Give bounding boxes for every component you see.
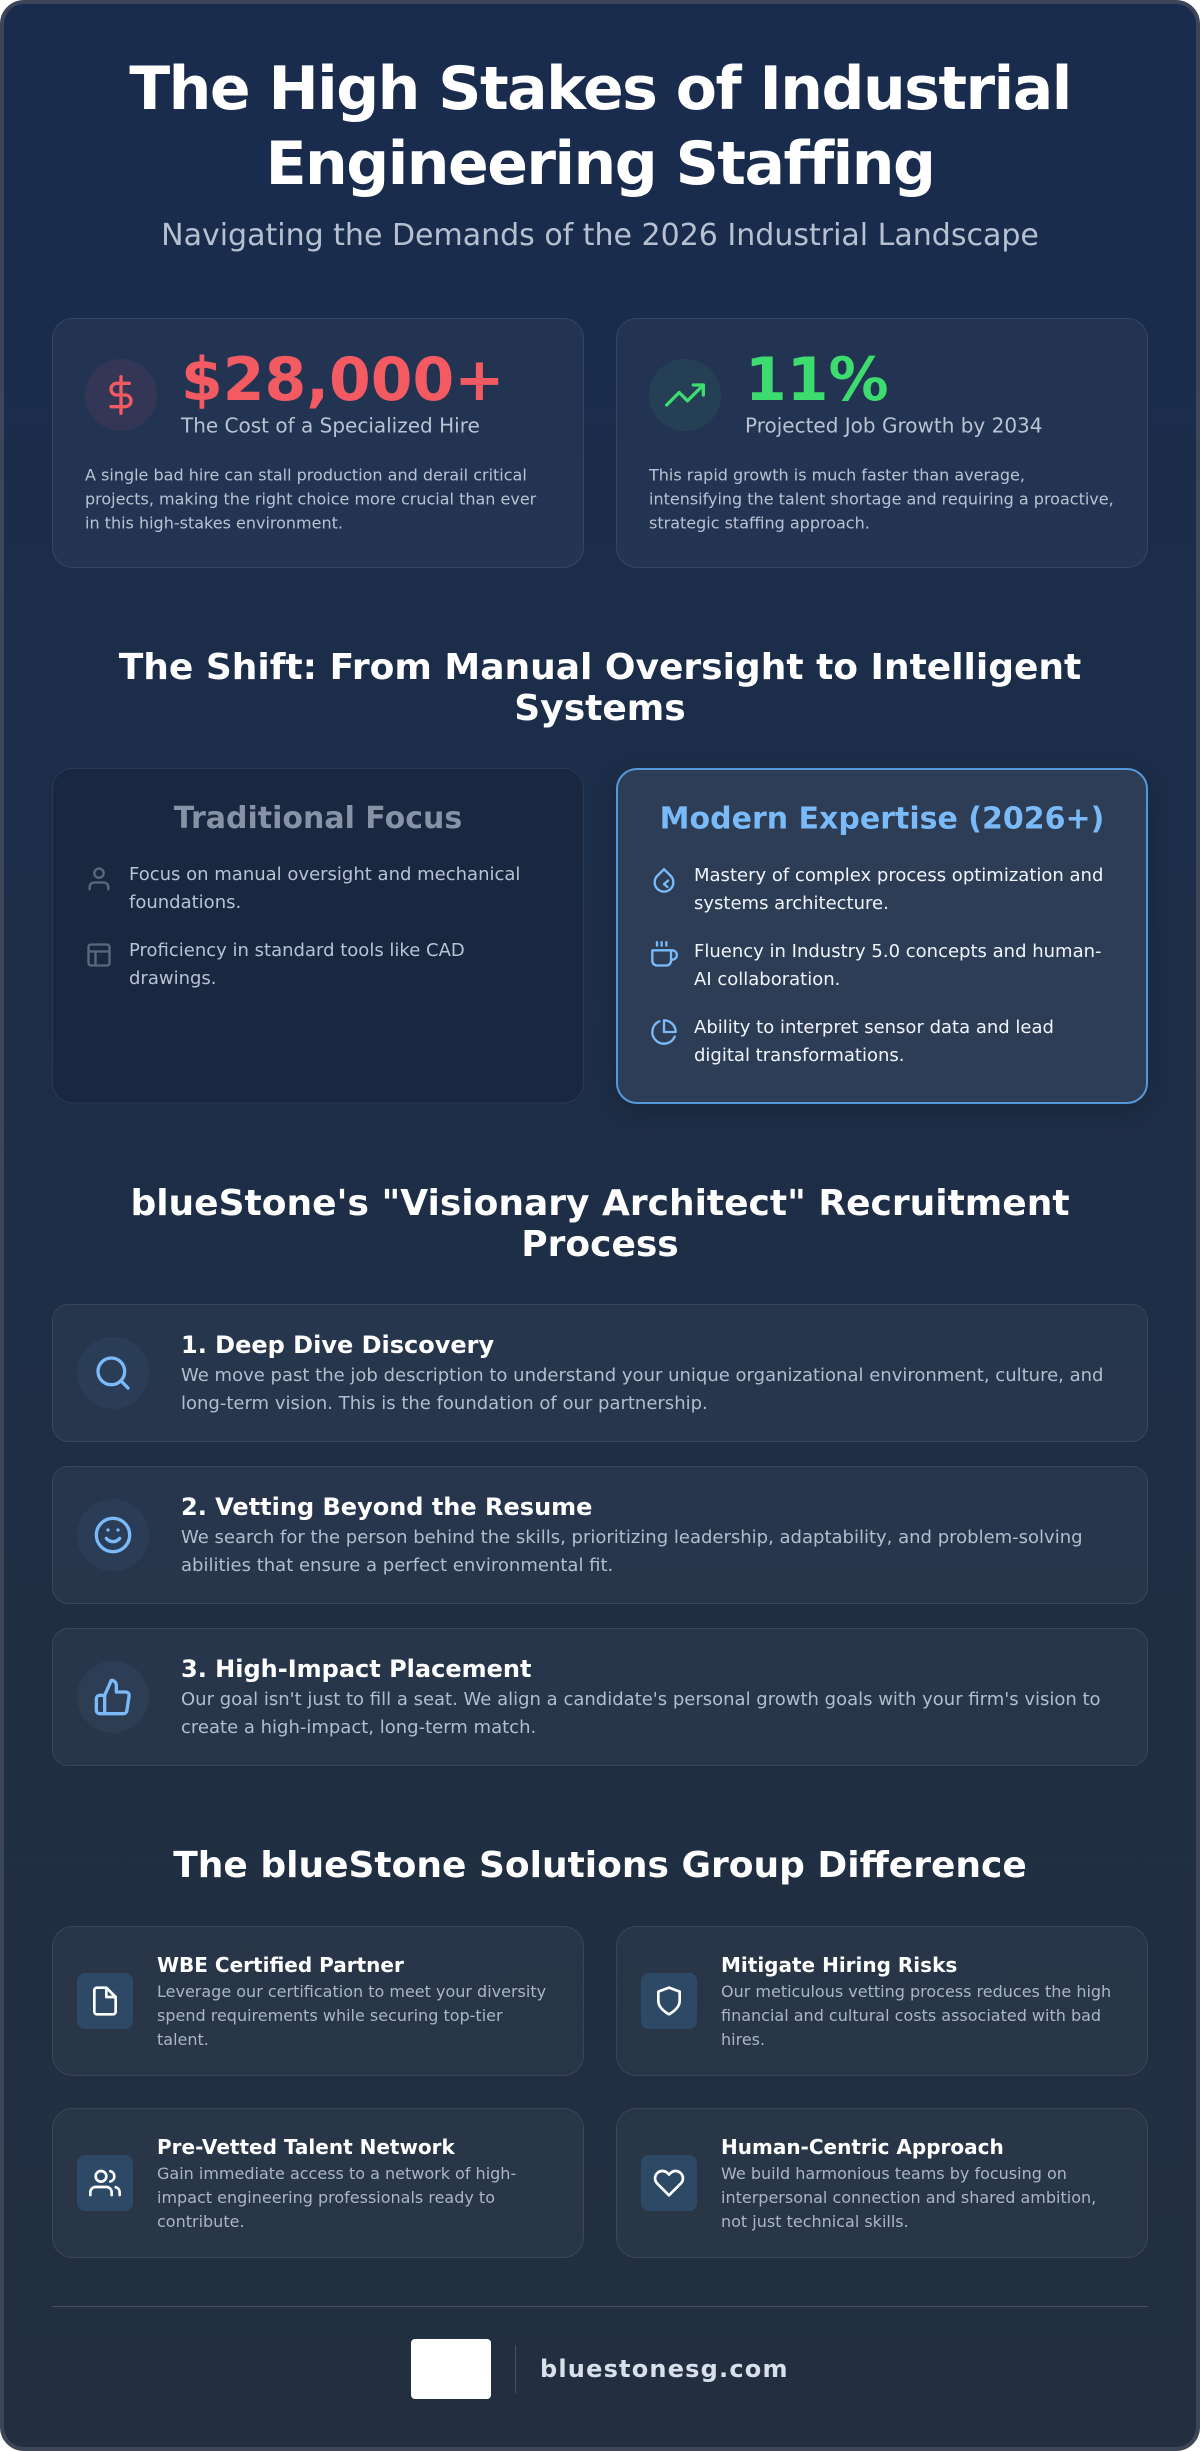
feature card: pre-vetted talent network — [52, 2108, 584, 2258]
feature description: talent. — [157, 2030, 209, 2049]
step description: create a high-impact, long-term match. — [181, 1717, 536, 1738]
list item: Ability to interpret sensor data and lead — [694, 1017, 1054, 1038]
feature card: human-centric approach — [616, 2108, 1148, 2258]
feature description: We build harmonious teams by focusing on — [721, 2164, 1067, 2183]
icon: dollar sign — [85, 359, 157, 431]
step title: 1. Deep Dive Discovery — [181, 1331, 495, 1359]
section heading: recruitment process: Process — [521, 1224, 679, 1265]
stat description: in this high-stakes environment. — [85, 514, 343, 532]
feature description: Our meticulous vetting process reduces the high — [721, 1982, 1111, 2001]
icon: shield — [641, 1973, 697, 2029]
feature card: mitigate hiring risks — [616, 1926, 1148, 2076]
feature title: WBE Certified Partner — [157, 1953, 404, 1977]
list item: Proficiency in standard tools like CAD — [129, 940, 465, 961]
icon: heart — [641, 2155, 697, 2211]
list item: digital transformations. — [694, 1045, 905, 1066]
panel: traditional focus — [52, 768, 584, 1103]
step description: abilities that ensure a perfect environmental fit. — [181, 1555, 613, 1576]
list item: Fluency in Industry 5.0 concepts and human- — [694, 941, 1102, 962]
icon: search — [77, 1337, 149, 1409]
stat description: strategic staffing approach. — [649, 514, 870, 532]
step description: long-term vision. This is the foundation of our partnership. — [181, 1393, 708, 1414]
subtitle: Navigating the Demands of the 2026 Industrial Landscape — [161, 218, 1039, 253]
list item: Focus on manual oversight and mechanical — [129, 864, 520, 885]
stat label: Projected Job Growth by 2034 — [745, 414, 1043, 438]
icon: coffee cup — [652, 942, 677, 966]
icon: users — [77, 2155, 133, 2211]
stat description: projects, making the right choice more crucial than ever — [85, 490, 537, 508]
icon: pie chart — [652, 1020, 676, 1044]
icon: smile — [77, 1499, 149, 1571]
stat description: intensifying the talent shortage and requiring a proactive, — [649, 490, 1114, 508]
list item: AI collaboration. — [694, 969, 840, 990]
feature card: WBE certified partner — [52, 1926, 584, 2076]
step 2: vetting beyond the resume — [52, 1466, 1148, 1604]
section heading: the shift: Systems — [514, 688, 686, 729]
stat card: cost of a specialized hire — [52, 318, 584, 568]
stat description: This rapid growth is much faster than average, — [648, 466, 1025, 484]
feature description: interpersonal connection and shared ambition, — [721, 2188, 1096, 2207]
feature title: Human-Centric Approach — [721, 2135, 1004, 2159]
feature description: not just technical skills. — [721, 2212, 909, 2231]
feature title: Pre-Vetted Talent Network — [157, 2135, 456, 2159]
stat card: projected job growth — [616, 318, 1148, 568]
list item: drawings. — [129, 968, 217, 989]
section heading: the difference: The blueStone Solutions Group Difference — [173, 1845, 1027, 1886]
feature description: hires. — [721, 2030, 765, 2049]
stat value: 11% — [745, 345, 889, 415]
stat label: The Cost of a Specialized Hire — [180, 414, 480, 438]
step description: We search for the person behind the skills, prioritizing leadership, adaptability, and problem-solving — [181, 1527, 1083, 1548]
section heading: recruitment process: blueStone's "Visionary Architect" Recruitment — [130, 1183, 1070, 1224]
footer — [411, 2339, 789, 2399]
panel: modern expertise — [617, 769, 1147, 1103]
feature description: Leverage our certification to meet your diversity — [157, 1982, 546, 2001]
feature description: financial and cultural costs associated with bad — [721, 2006, 1101, 2025]
list item: Mastery of complex process optimization and — [694, 865, 1103, 886]
icon: droplet — [655, 869, 673, 892]
step 3: high-impact placement — [52, 1628, 1148, 1766]
panel heading: Modern Expertise (2026+) — [660, 802, 1104, 836]
feature description: Gain immediate access to a network of high- — [157, 2164, 516, 2183]
feature title: Mitigate Hiring Risks — [721, 1953, 957, 1977]
icon: user — [90, 869, 108, 890]
panel heading: Traditional Focus — [174, 801, 462, 836]
logo placeholder — [411, 2339, 491, 2399]
step title: 3. High-Impact Placement — [181, 1655, 531, 1683]
step description: We move past the job description to understand your unique organizational environment, culture, and — [181, 1365, 1103, 1386]
feature description: contribute. — [157, 2212, 245, 2231]
feature description: spend requirements while securing top-tier — [157, 2006, 503, 2025]
list item: systems architecture. — [694, 893, 889, 914]
icon: trending up — [649, 359, 721, 431]
feature description: impact engineering professionals ready to — [157, 2188, 495, 2207]
header title: Engineering Staffing — [266, 129, 934, 199]
header title: The High Stakes of Industrial — [129, 54, 1071, 124]
step description: Our goal isn't just to fill a seat. We align a candidate's personal growth goals with your firm's vision to — [181, 1689, 1101, 1710]
website address: bluestonesg.com — [540, 2355, 789, 2383]
step 1: deep dive discovery — [52, 1304, 1148, 1442]
list item: foundations. — [129, 892, 241, 913]
icon: thumbs up — [77, 1661, 149, 1733]
step title: 2. Vetting Beyond the Resume — [181, 1493, 592, 1521]
icon: layout — [89, 945, 110, 966]
icon: file — [77, 1973, 133, 2029]
stat description: A single bad hire can stall production and derail critical — [85, 466, 527, 484]
stat value: $28,000+ — [181, 345, 505, 415]
section heading: the shift: The Shift: From Manual Oversight to Intelligent — [119, 647, 1081, 688]
